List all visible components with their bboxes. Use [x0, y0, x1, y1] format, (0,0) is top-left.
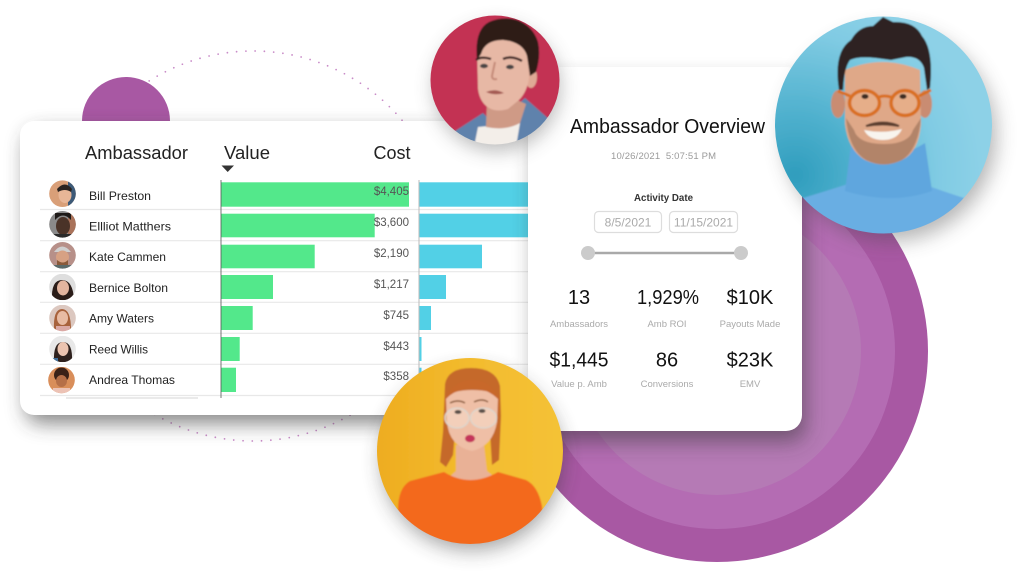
portrait: woman blowing kiss: [375, 356, 565, 556]
stat: value per ambassador: Value p. Amb: [551, 379, 607, 390]
table column headings: Ambassador: [85, 143, 188, 163]
sort arrow: [222, 166, 234, 172]
table column headings: Cost: [374, 143, 410, 163]
stat: conversions: 86: [656, 350, 678, 372]
end date field: 11/15/2021: [674, 216, 733, 230]
stat: ambassador ROI: 1,929%: [637, 287, 699, 309]
avatar: Bernice Bolton: [49, 274, 76, 301]
value labels: $1,217: [374, 279, 409, 291]
ambassador names: Andrea Thomas: [89, 373, 175, 387]
start date field: 8/5/2021: [605, 216, 652, 230]
table column headings: [85, 143, 410, 163]
stat: ambassadors: [550, 287, 608, 330]
value labels: $443: [383, 341, 409, 353]
ambassador names: Ellliot Matthers: [89, 220, 171, 234]
stat: ambassador ROI: Amb ROI: [647, 319, 687, 330]
stat: conversions: Conversions: [641, 379, 694, 390]
value labels: $2,190: [374, 248, 409, 260]
cost bars: [419, 182, 529, 392]
dotted orbit ring: [58, 51, 448, 441]
date range slider: [581, 246, 748, 260]
stat: ambassador ROI: [637, 287, 699, 330]
panel: ambassador table: [20, 121, 540, 423]
avatar: Kate Cammen: [49, 242, 76, 270]
small purple circle: [82, 77, 170, 165]
ambassador names: Amy Waters: [89, 312, 154, 326]
portrait: man with denim jacket: [428, 13, 562, 150]
portrait: smiling man with orange glasses: [773, 14, 996, 241]
value labels: $4,405: [374, 186, 409, 198]
report timestamp: 10/26/2021 5:07:51 PM: [611, 151, 716, 162]
value labels: $358: [383, 371, 409, 383]
stat: EMV: $23K: [727, 350, 774, 372]
stat: ambassadors: Ambassadors: [550, 319, 608, 330]
panel: ambassador overview: [528, 67, 806, 442]
row separators and axis lines: [40, 210, 530, 398]
avatar: Amy Waters: [49, 305, 76, 332]
overview title: Ambassador Overview: [570, 116, 766, 138]
avatar: Elliot Matthers: [49, 211, 76, 239]
avatar: Reed Willis: [49, 336, 76, 363]
ambassador names: Bernice Bolton: [89, 281, 168, 295]
large concentric purple circles: [506, 140, 928, 562]
stat: payouts made: Payouts Made: [720, 319, 780, 330]
stat: payouts made: $10K: [727, 287, 774, 309]
stat: payouts made: [720, 287, 780, 330]
stat: ambassadors: 13: [568, 287, 590, 309]
table column headings: Value: [224, 143, 270, 163]
stat: value per ambassador: $1,445: [550, 350, 608, 372]
ambassador names: Reed Willis: [89, 342, 148, 356]
stat: value per ambassador: [550, 350, 608, 390]
ambassador names: Kate Cammen: [89, 250, 166, 264]
value bars: [221, 182, 409, 392]
stat: EMV: [727, 350, 774, 390]
end date field: [670, 212, 738, 232]
avatar: Andrea Thomas: [48, 367, 75, 394]
stat: EMV: EMV: [740, 379, 761, 390]
value labels: $745: [383, 310, 409, 322]
avatar: Bill Preston: [49, 180, 76, 207]
ambassador names: [89, 189, 175, 387]
ambassador names: Bill Preston: [89, 189, 151, 203]
value labels: [374, 186, 409, 383]
value labels: $3,600: [374, 217, 409, 229]
activity date label: Activity Date: [634, 193, 693, 204]
stat: conversions: [641, 350, 694, 390]
start date field: [594, 212, 662, 232]
